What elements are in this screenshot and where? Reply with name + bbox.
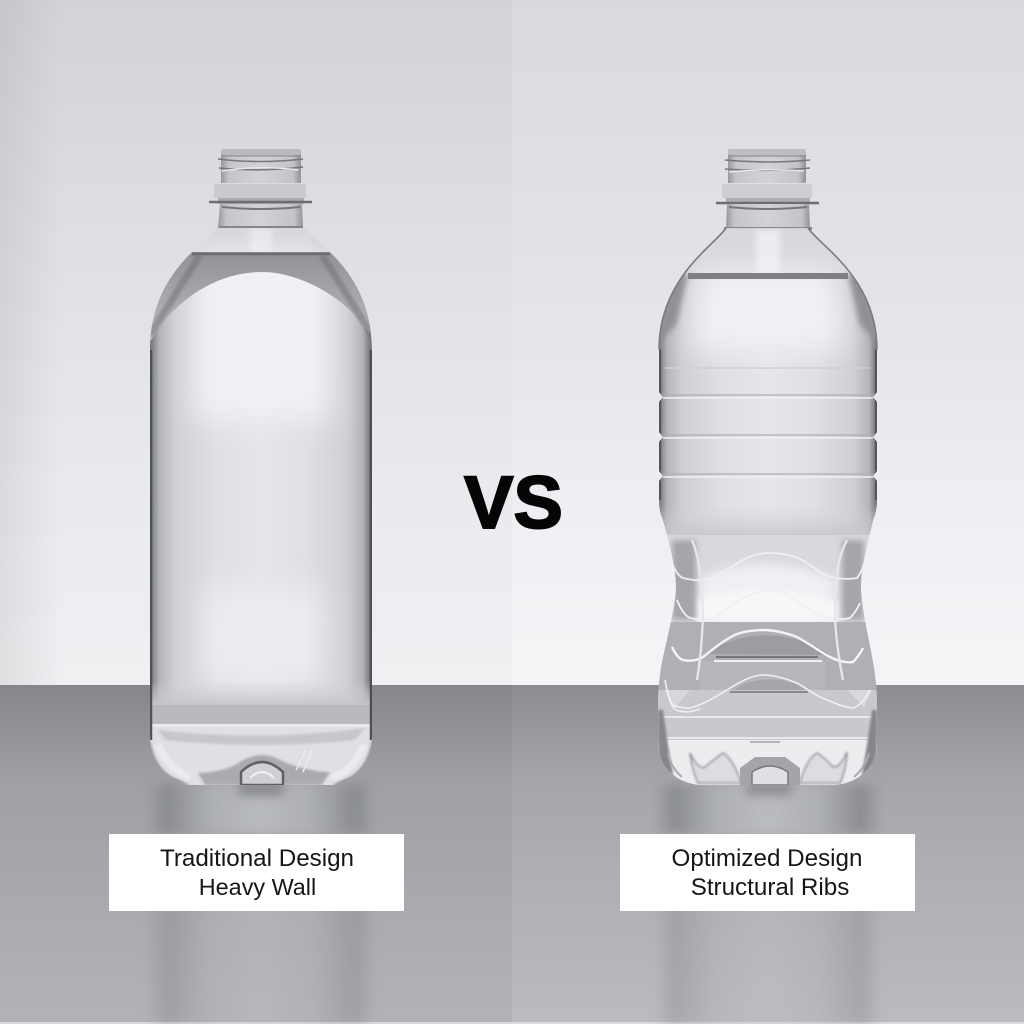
reflection: right bottle [654,784,882,1024]
shoulder air gap [680,230,852,274]
shoulder edge [659,228,877,350]
bottle: optimized structural ribs [650,149,886,790]
bottle body [658,228,877,785]
base dome [198,755,330,785]
water body [150,294,372,703]
shoulder air gap [190,228,312,254]
label: optimized design: Optimized Design [672,845,862,872]
lower bands [658,717,877,738]
bottle neck and cap threads [716,149,819,230]
label: optimized design: Structural Ribs [691,874,849,901]
wall edges [150,350,152,740]
central bright region [195,250,330,420]
panel: left background [0,0,512,1024]
base [150,727,372,790]
lower grey band [152,682,370,705]
bottle neck and cap threads [209,149,312,229]
label: traditional design: Traditional Design [160,845,354,872]
label: traditional design: Heavy Wall [199,874,316,900]
petaloid base [690,752,847,783]
horizontal ribs [663,368,873,477]
label: optimized design [620,834,915,911]
bottle: traditional heavy wall [140,149,382,790]
dark shoulder band [150,252,371,342]
label: traditional design [109,834,404,911]
water body [659,323,877,534]
wall edges [660,350,876,500]
VS heading: VS [464,461,563,544]
water surface [688,273,848,279]
panel: right background [512,0,1024,1024]
reflection: left bottle [146,784,376,1024]
wave ribs [670,553,865,620]
waist section [667,535,870,540]
bottle body [150,228,372,785]
